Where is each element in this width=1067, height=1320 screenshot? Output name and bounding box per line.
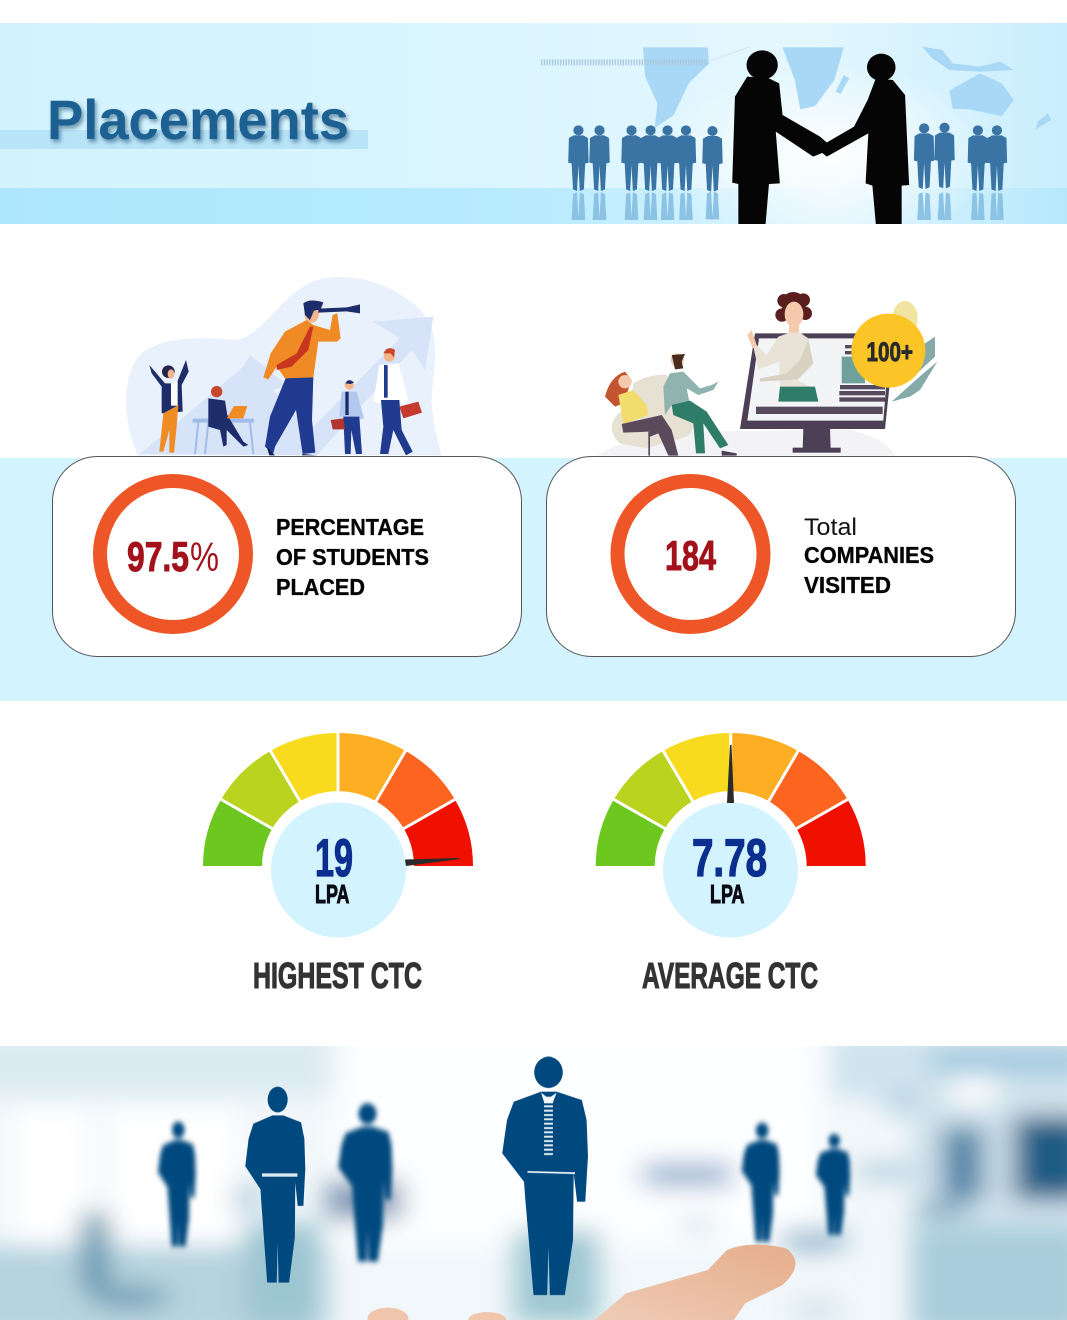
stats band background — [0, 458, 1067, 701]
crowd reflection — [572, 192, 1004, 220]
leaves — [892, 301, 937, 402]
gauge: highest CTC — [198, 728, 478, 996]
label: Total — [804, 514, 857, 541]
handshake silhouettes — [732, 50, 909, 224]
label — [804, 514, 934, 598]
label: PLACED — [276, 574, 365, 600]
value: 97.5 — [127, 533, 189, 580]
caption: AVERAGE CTC — [642, 955, 818, 996]
sofa and viewers — [605, 353, 737, 456]
label: VISITED — [804, 572, 891, 598]
value: 19 — [315, 829, 353, 888]
background figures — [158, 1103, 850, 1262]
banner — [0, 23, 1067, 245]
value: 7.78 — [692, 829, 767, 888]
unit: LPA — [315, 879, 350, 909]
blurred office background — [0, 1033, 1067, 1320]
bottom photo: selecting the right candidate — [0, 1033, 1067, 1320]
hand — [367, 1245, 795, 1320]
main man with telescope — [263, 301, 360, 455]
world map — [541, 47, 1051, 129]
presenter — [747, 292, 818, 402]
ring — [100, 481, 246, 627]
needle — [405, 858, 460, 866]
label: PERCENTAGE — [276, 514, 424, 540]
badge text: 100+ — [866, 337, 913, 367]
gauge: average CTC — [591, 728, 871, 996]
caption: HIGHEST CTC — [253, 955, 422, 996]
title: Placements — [47, 88, 349, 151]
value: 184 — [665, 532, 716, 579]
illustration: team looking ahead — [126, 277, 442, 455]
tall man with case — [373, 348, 422, 455]
unit: LPA — [710, 879, 745, 909]
label: OF STUDENTS — [276, 544, 429, 570]
small man with case — [331, 380, 364, 454]
illustration: online session — [597, 292, 937, 456]
label: COMPANIES — [804, 542, 934, 568]
badge circle — [851, 314, 925, 388]
gauge hub — [271, 802, 406, 938]
monitor — [740, 333, 895, 453]
title band — [0, 130, 368, 149]
ring — [618, 481, 764, 627]
woman figure — [245, 1087, 305, 1283]
central figure — [502, 1057, 588, 1295]
label — [276, 514, 429, 600]
card: students placed — [52, 456, 522, 656]
needle — [727, 745, 734, 803]
gauge hub — [663, 802, 798, 938]
seated woman at desk — [193, 386, 254, 454]
cheering woman — [149, 360, 189, 453]
small crowd — [568, 123, 1007, 192]
value: % — [190, 534, 219, 580]
card: companies visited — [546, 456, 1016, 656]
